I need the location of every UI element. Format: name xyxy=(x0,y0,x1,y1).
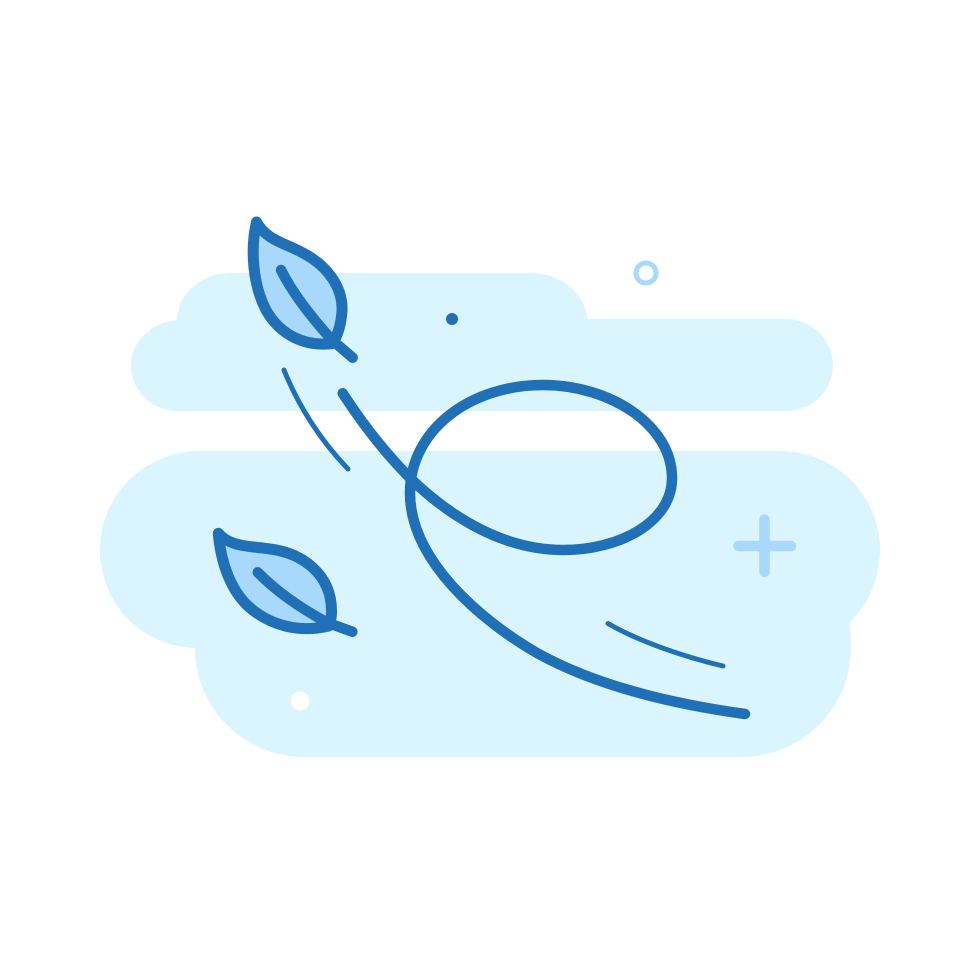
decoration: dark dot xyxy=(446,313,458,325)
decoration: plus sign xyxy=(738,520,791,572)
icon: upper leaf xyxy=(253,222,353,358)
decoration: ring xyxy=(636,263,656,283)
short wind line: lower right xyxy=(608,624,723,666)
background cloud: upper xyxy=(131,273,833,411)
wind swirl line xyxy=(343,385,745,714)
background cloud: lower xyxy=(100,451,880,757)
decoration: white dot xyxy=(290,692,310,710)
icon: lower leaf xyxy=(218,533,352,632)
short wind line: left xyxy=(284,370,348,469)
